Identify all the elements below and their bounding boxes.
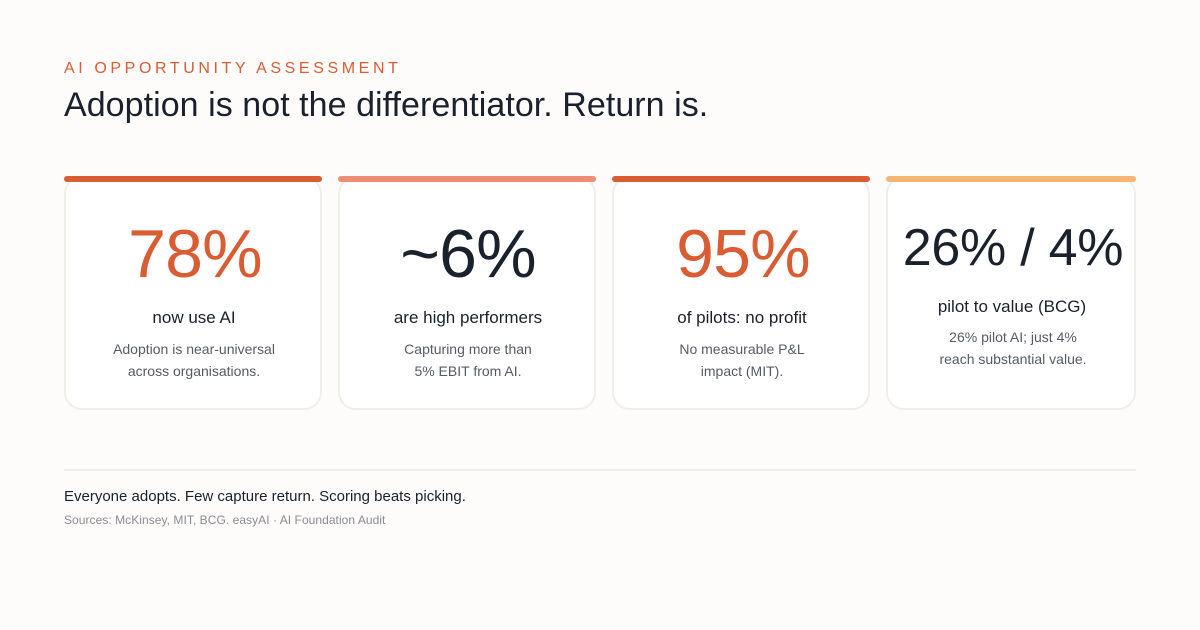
- takeaway: Everyone adopts. Few capture return. Scoring beats picking.: [64, 488, 466, 505]
- eyebrow label: AI OPPORTUNITY ASSESSMENT: [64, 60, 401, 77]
- description: impact (MIT).: [701, 363, 783, 379]
- description: across organisations.: [128, 363, 260, 379]
- description: [939, 329, 1087, 367]
- label: are high performers: are high performers: [394, 308, 542, 327]
- description: 26% pilot AI; just 4%: [949, 329, 1077, 345]
- stat: ~6%: ~6%: [400, 216, 536, 292]
- description: reach substantial value.: [939, 351, 1087, 367]
- panel: 26% / 4% pilot to value: [886, 176, 1136, 410]
- description: Adoption is near-universal: [113, 341, 275, 357]
- label: pilot to value (BCG): pilot to value (BCG): [938, 297, 1086, 316]
- label: now use AI: now use AI: [152, 308, 236, 327]
- description: 5% EBIT from AI.: [414, 363, 522, 379]
- sources: Sources: McKinsey, MIT, BCG. easyAI · AI Foundation Audit: [64, 513, 385, 527]
- title: Adoption is not the differentiator. Return is.: [64, 86, 708, 124]
- panel: 78% now use AI: [64, 176, 322, 410]
- stat: 26% / 4%: 26% / 4%: [903, 219, 1123, 277]
- label: of pilots: no profit: of pilots: no profit: [677, 308, 807, 327]
- description: [113, 341, 275, 379]
- stat: 95%: 95%: [676, 216, 810, 292]
- stat: 78%: 78%: [128, 216, 262, 292]
- description: [404, 341, 532, 379]
- description: [679, 341, 805, 379]
- panel: 95% of pilots: [612, 176, 870, 410]
- description: No measurable P&L: [679, 341, 805, 357]
- description: Capturing more than: [404, 341, 532, 357]
- panel: ~6% high performers: [338, 176, 596, 410]
